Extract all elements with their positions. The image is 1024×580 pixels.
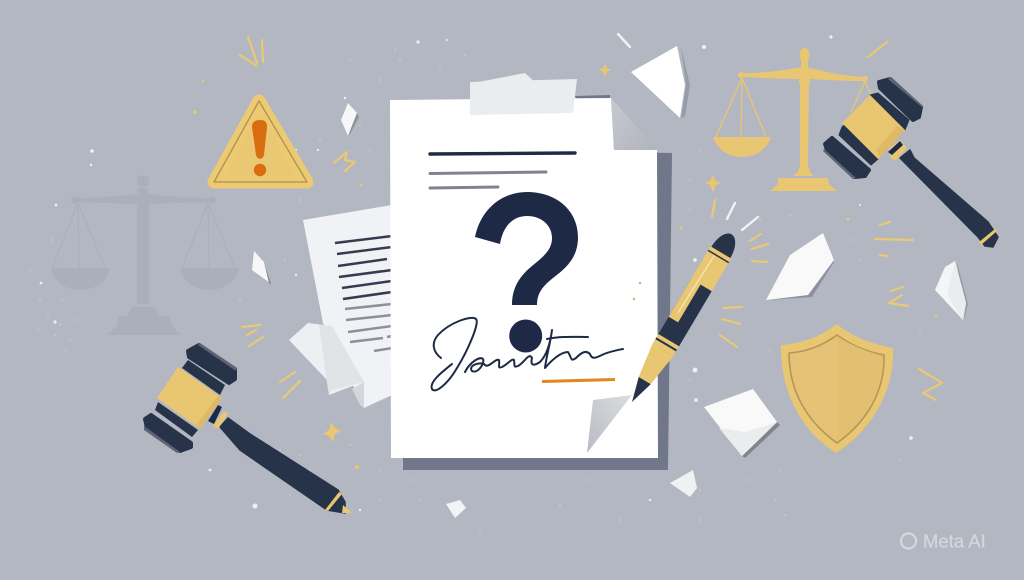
gavel head (157, 367, 222, 429)
white speckles (40, 35, 913, 511)
back paper sheet (303, 205, 392, 408)
gavel head (842, 95, 905, 159)
gavel handle (220, 418, 345, 513)
question mark (475, 192, 578, 352)
gavel handle (900, 150, 998, 247)
paper fold top right (611, 98, 657, 150)
orange underline (542, 380, 615, 382)
tape (470, 73, 577, 115)
signature (432, 318, 623, 390)
warning triangle icon (214, 101, 307, 182)
shield icon (781, 324, 893, 453)
crumpled paper piece (289, 323, 364, 408)
pen (622, 228, 742, 408)
white accent marks (618, 34, 758, 230)
gavel top right (823, 77, 998, 247)
gold sparkles (193, 64, 937, 469)
gold accent marks (240, 37, 942, 400)
main paper shadow (403, 95, 672, 470)
faded background scales (51, 175, 239, 335)
paper fold bottom right (587, 395, 632, 453)
watermark: Meta AI: Meta AI (923, 530, 986, 552)
paper shards (252, 46, 968, 518)
gavel bottom left (144, 343, 352, 513)
main document (390, 73, 658, 458)
golden scales (713, 48, 872, 191)
heading lines (430, 153, 575, 188)
icon: exclamation mark (252, 120, 267, 176)
